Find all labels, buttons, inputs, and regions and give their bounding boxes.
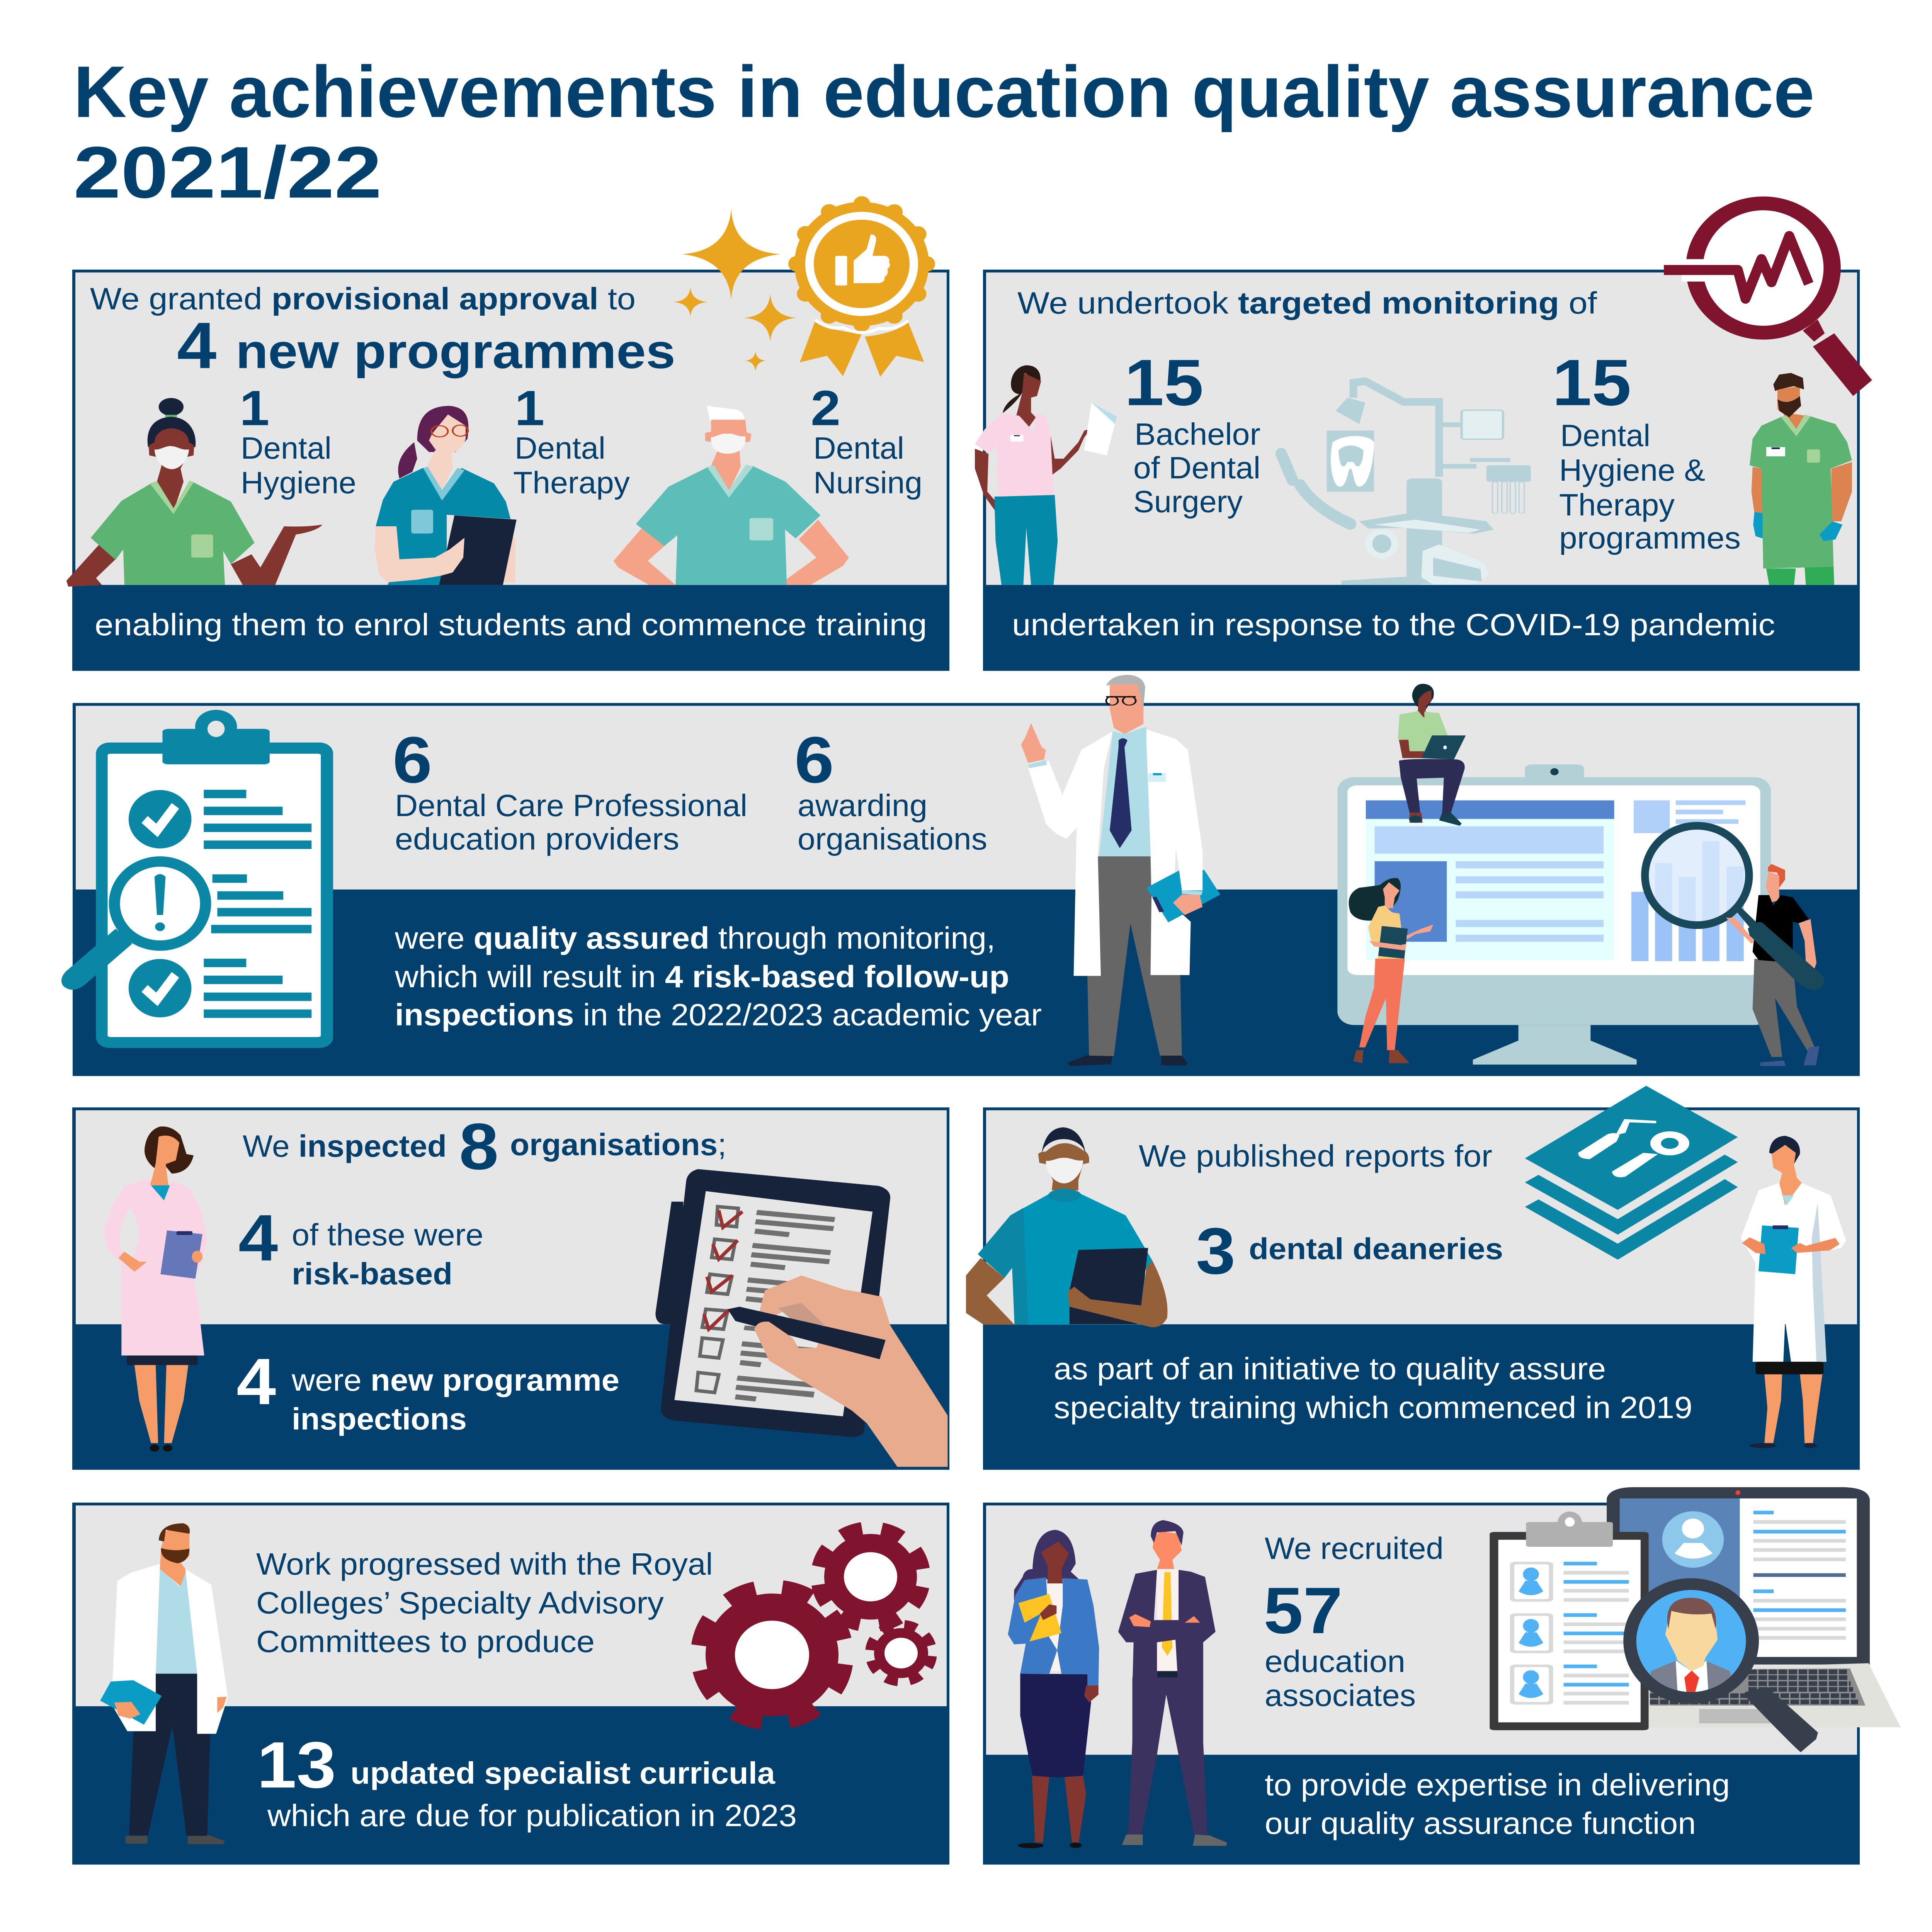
heading: inspected 8 organisations <box>243 1110 726 1183</box>
figure: woman with clipboard <box>1349 878 1433 1063</box>
stat: 4 risk-based: 4 <box>238 1201 278 1274</box>
figure: hygienist in green scrubs <box>66 398 323 587</box>
stat: 4 new programme inspections: 4 <box>236 1345 276 1418</box>
stat: 13 updated curricula <box>257 1728 797 1833</box>
heading: targeted monitoring: We undertook targeted monitoring of <box>1017 286 1597 320</box>
icon: magnifier over candidate <box>1623 1578 1818 1752</box>
stat: 13 updated curricula: which are due for publication in 2023 <box>267 1798 797 1833</box>
band text: initiative <box>1054 1351 1692 1425</box>
stat: dental nursing: 2 <box>811 381 840 436</box>
stat: dental hygiene and therapy: 15 <box>1552 346 1631 419</box>
text: recruited 57: We recruited <box>1265 1531 1444 1566</box>
stat: dental hygiene: Hygiene <box>241 466 356 500</box>
figure: businessman with crossed arms <box>1118 1520 1226 1846</box>
panel: specialist curricula <box>72 1503 949 1865</box>
band text: initiative: specialty training which commenced in 2019 <box>1054 1390 1692 1425</box>
stat: 13 updated curricula: updated specialist curricula <box>350 1756 776 1790</box>
text: royal colleges: Committees to produce <box>256 1624 595 1659</box>
figure: woman in white coat <box>1741 1136 1846 1448</box>
band text: expertise: our quality assurance function <box>1265 1806 1696 1840</box>
stat: bachelor of dental surgery: of Dental <box>1133 451 1260 485</box>
stat: dental nursing <box>811 381 922 500</box>
number: 4 new programmes: 4 <box>177 309 216 382</box>
stat: bachelor of dental surgery: 15 <box>1124 346 1204 419</box>
title: Key achievements in education quality assurance <box>73 51 1815 133</box>
panel: education associates <box>983 1487 1901 1865</box>
stat: 6 awarding organisations: 6 <box>794 723 834 797</box>
icon: thumbs-up medal <box>794 202 929 377</box>
icon: desktop monitor <box>1337 764 1771 1065</box>
stat: bachelor of dental surgery: Surgery <box>1133 485 1243 519</box>
text: recruited 57: education <box>1265 1644 1405 1679</box>
stat: dental hygiene and therapy: Hygiene & <box>1559 453 1705 487</box>
stat: dental therapy: Therapy <box>513 466 630 500</box>
band text: quality assured <box>395 921 1042 1032</box>
stat: 6 education providers: education providers <box>395 822 679 856</box>
stat: 4 risk-based: of these were <box>292 1218 483 1252</box>
icon: dental chair <box>1281 381 1531 585</box>
icon: clipboard of candidate profiles <box>1490 1512 1649 1730</box>
stat: dental hygiene and therapy: programmes <box>1559 521 1741 555</box>
band text: quality assured: inspections in the 2022/2023 academic year <box>395 998 1042 1032</box>
stat: bachelor of dental surgery <box>1124 346 1260 519</box>
icon: clipboard checklist with magnifier <box>61 710 333 1048</box>
icon: stacked report layers with dental tools <box>1525 1086 1738 1260</box>
stat: 4 risk-based <box>238 1201 483 1291</box>
panel: inspections <box>72 1107 949 1470</box>
panel: provisional approval <box>66 202 949 671</box>
text: royal colleges: Colleges’ Specialty Advisory <box>256 1586 664 1620</box>
heading: published reports: We published reports for <box>1139 1139 1492 1173</box>
stat: 4 risk-based: risk-based <box>292 1257 452 1291</box>
band text: enabling: enabling them to enrol students and commence training <box>95 607 927 642</box>
stat: 6 education providers <box>393 723 747 856</box>
stat: dental nursing: Dental <box>813 431 904 465</box>
stat: 6 education providers: Dental Care Professional <box>395 788 747 823</box>
stat: 4 new programme inspections <box>236 1345 619 1436</box>
text: recruited 57: associates <box>1265 1678 1416 1713</box>
figure: doctor in white coat <box>1021 675 1220 1066</box>
stat: 4 new programme inspections: inspections <box>292 1402 467 1436</box>
panel: quality assured providers <box>61 675 1860 1076</box>
band text: quality assured: which will result in 4 risk-based follow-up <box>395 959 1009 994</box>
band text: expertise: to provide expertise in delivering <box>1265 1768 1730 1802</box>
icon: maroon gears <box>690 1519 935 1731</box>
title: 2021/22 <box>73 131 382 213</box>
icon: tablet checklist with hand <box>655 1169 948 1467</box>
panel: targeted monitoring <box>975 196 1872 671</box>
stat: dental hygiene <box>240 381 356 500</box>
text: royal colleges <box>256 1547 713 1659</box>
heading: provisional approval: We granted provisional approval to <box>90 281 636 316</box>
stat: 6 awarding organisations <box>794 723 987 856</box>
figure: bearded clinician in green scrubs <box>1750 373 1852 585</box>
text: royal colleges: Work progressed with the Royal <box>256 1547 713 1581</box>
stat: 6 awarding organisations: organisations <box>798 822 987 856</box>
panel: published reports <box>966 1086 1860 1470</box>
stat: 6 awarding organisations: awarding <box>798 788 927 823</box>
stat: 6 education providers: 6 <box>393 723 432 797</box>
figure: woman in pink coat <box>104 1126 207 1452</box>
band text: expertise <box>1265 1768 1730 1840</box>
icon: laptop with profile <box>1607 1487 1901 1727</box>
heading: inspected 8 organisations: We inspected <box>243 1129 447 1163</box>
figure: bearded man in white coat <box>100 1523 228 1844</box>
stat: 3 dental deaneries: dental deaneries <box>1249 1232 1503 1266</box>
figure: nurse in turquoise scrubs <box>614 406 849 585</box>
stat: dental therapy: 1 <box>515 381 544 436</box>
text: recruited 57: 57 <box>1264 1574 1343 1647</box>
band text: initiative: as part of an initiative to quality assure <box>1054 1351 1606 1386</box>
figure: person with laptop on monitor <box>1398 684 1466 826</box>
heading: inspected 8 organisations: 8 <box>459 1110 498 1183</box>
figure: man with giant magnifier <box>1645 826 1824 1066</box>
number: 4 new programmes: new programmes <box>236 324 675 378</box>
stat: dental therapy: Dental <box>515 431 605 465</box>
stat: 13 updated curricula: 13 <box>257 1728 336 1802</box>
stat: dental hygiene and therapy: Therapy <box>1559 488 1675 522</box>
figure: businesswoman in blue blazer <box>1008 1530 1099 1848</box>
title <box>73 51 1815 213</box>
band text: covid response: undertaken in response to the COVID-19 pandemic <box>1012 607 1775 642</box>
stat: dental hygiene and therapy <box>1552 346 1741 555</box>
band text: quality assured: were quality assured through monitoring, <box>395 921 995 955</box>
number: 4 new programmes <box>177 309 675 382</box>
figure: man in surgical mask <box>966 1128 1167 1327</box>
stat: bachelor of dental surgery: Bachelor <box>1134 417 1260 451</box>
icon: magnifier with pulse line <box>1664 196 1872 396</box>
stat: 4 new programme inspections: were new programme <box>291 1363 619 1397</box>
stat: dental therapy <box>513 381 630 500</box>
figure: therapist in teal scrubs <box>374 406 517 585</box>
stat: dental hygiene: 1 <box>240 381 269 436</box>
icon: sparkles <box>673 209 797 371</box>
text: recruited 57 <box>1264 1531 1444 1713</box>
stat: 3 dental deaneries <box>1196 1214 1503 1288</box>
stat: dental nursing: Nursing <box>813 466 922 500</box>
stat: 3 dental deaneries: 3 <box>1196 1214 1235 1288</box>
figure: nurse in pink top <box>975 365 1117 585</box>
stat: dental hygiene: Dental <box>241 431 332 465</box>
stat: dental hygiene and therapy: Dental <box>1560 418 1650 453</box>
heading: inspected 8 organisations: organisations; <box>510 1128 726 1162</box>
